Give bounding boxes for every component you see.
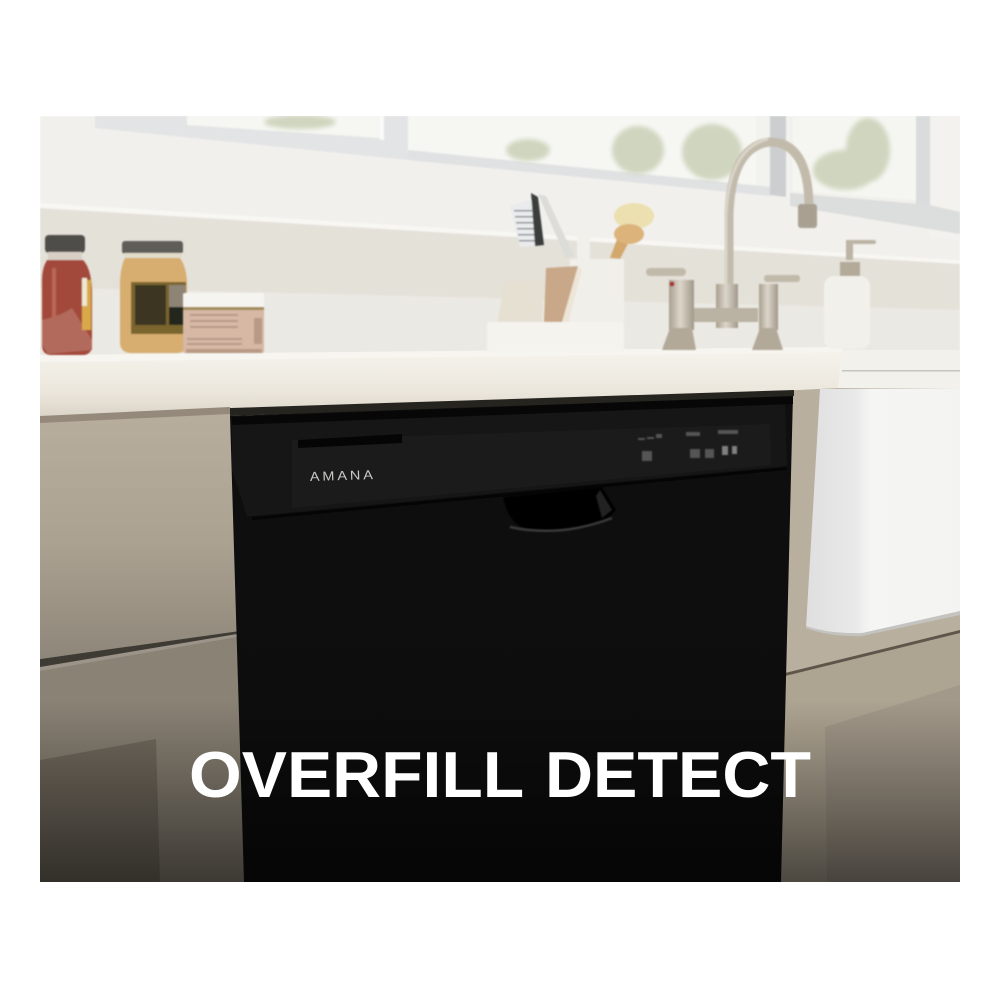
control buttons [638,430,738,461]
door handle [503,487,616,530]
farmhouse sink [806,350,960,636]
caddy cup [570,258,624,302]
jar: red sauce [42,235,92,355]
control panel [232,404,787,516]
title: DETECT [545,738,811,811]
dark bottom gradient [40,700,960,882]
cleaning brush [538,194,572,254]
soap dispenser [824,239,877,308]
brand name: AMANA [310,467,376,484]
right cabinet and counter side [778,388,960,882]
infographic canvas [40,116,960,882]
dishwasher body [230,394,793,882]
wooden brush [610,240,628,260]
kitchen photo scene [40,115,960,882]
display strip [298,434,402,448]
trees outside window [264,115,890,190]
brush caddy [487,193,654,352]
sponges [498,298,543,322]
countertop [40,347,842,423]
backsplash wall [40,116,960,376]
caddy tray [488,322,570,350]
left cabinet doors [40,410,248,882]
window panes [95,116,960,240]
jar: white lid tub [183,293,264,353]
faucet [646,139,817,350]
jar: mustard [120,241,187,353]
title: OVERFILL [189,738,523,811]
